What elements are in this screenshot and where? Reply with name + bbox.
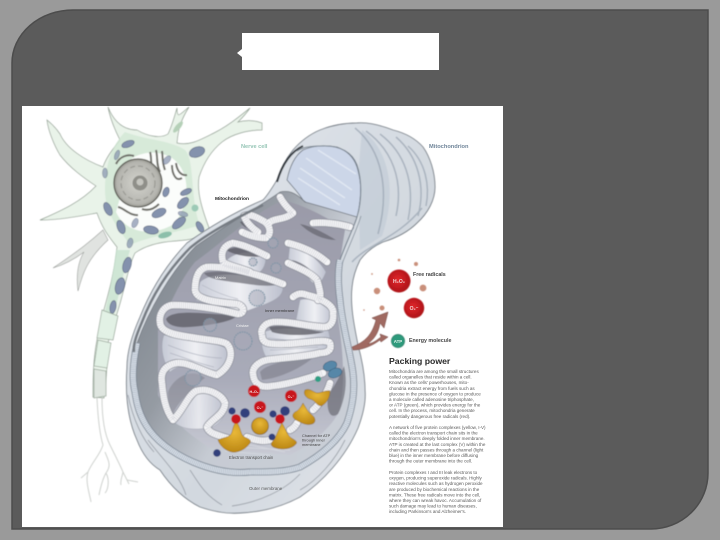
energy molecule label: Energy molecule <box>409 338 451 344</box>
ATP in chain <box>315 376 321 382</box>
cristae label: Cristae <box>236 323 249 328</box>
mitochondrion <box>126 123 435 513</box>
labels: O₂⁻ <box>410 306 419 312</box>
title box <box>237 33 439 70</box>
electron transport chain <box>213 359 343 457</box>
complex III <box>271 423 297 449</box>
ATP channel <box>322 359 343 380</box>
paragraph 3: such damage may lead to human diseases, <box>389 504 477 509</box>
free radicals label: Free radicals <box>413 272 446 278</box>
mitochondrion heading label: Mitochondrion <box>429 144 469 150</box>
electron transport chain label: Electron transport chain <box>229 455 274 460</box>
labels: ATP <box>394 339 402 344</box>
hydrogen peroxide molecule <box>388 270 410 292</box>
dark cristae pockets <box>166 221 346 416</box>
paragraph 1: potentially dangerous free radicals (red). <box>389 414 470 419</box>
labels: H₂O₂ <box>249 390 259 394</box>
channel label: Channel for ATP <box>302 433 331 438</box>
paragraph 2: chain and then passes through a channel (light <box>389 447 484 452</box>
neuron body <box>40 107 262 398</box>
neuron mitochondrion label: Mitochondrion <box>215 196 249 202</box>
outer membrane <box>126 123 435 513</box>
paragraph 3: where they can wreak havoc. Accumulation of <box>389 498 482 503</box>
paragraph 3: Protein complexes I and III leak electrons to <box>389 470 478 475</box>
free radicals in matrix <box>231 385 297 424</box>
matrix label: Matrix <box>215 275 226 280</box>
paragraph 1: Mitochondria are among the small structures <box>389 369 479 374</box>
paragraph 1: cell. In the process, mitochondria generate <box>389 408 475 413</box>
nerve cell <box>40 107 262 502</box>
paragraph 2: A network of five protein complexes (yellow, I-V) <box>389 425 486 430</box>
paragraph 2: mitochondrion's deeply folded inner membrane. <box>389 436 485 441</box>
free radical release <box>352 259 426 350</box>
cell shading <box>105 132 200 245</box>
paragraph 3: oxygen, producing superoxide radicals. Highly <box>389 476 482 481</box>
left outer wall <box>134 205 263 352</box>
golgi and ER <box>116 150 187 215</box>
text block: Packing power <box>389 356 486 514</box>
paragraph 3: are produced by biochemical reactions in the <box>389 487 480 492</box>
bottom folds <box>128 395 345 506</box>
dome folds <box>352 128 427 262</box>
fins <box>162 244 333 429</box>
paragraph 1: a molecule called adenosine triphosphate, <box>389 397 474 402</box>
paragraph 2: through the outer membrane into the cell. <box>389 459 472 464</box>
matrix streaks <box>225 443 290 455</box>
nucleolus <box>132 176 148 190</box>
nucleus <box>114 159 162 207</box>
complex I <box>218 422 250 452</box>
channel label: membrane <box>302 442 321 447</box>
paragraph 2: called the electron transport chain sits in the <box>389 431 478 436</box>
paragraph 1: chondria extract energy from fuels such as <box>389 386 475 391</box>
matrix <box>158 200 345 455</box>
neuron mitochondria <box>102 139 206 314</box>
paragraph 3: reactive molecules such as hydrogen peroxide <box>389 481 483 486</box>
heading: Packing power <box>389 356 451 366</box>
outer membrane label: Outer membrane <box>249 486 283 491</box>
inner membrane label: Inner membrane <box>265 308 295 313</box>
inner membrane: cristae <box>160 197 350 441</box>
paragraph 1: called organelles that reside within a cell. <box>389 375 472 380</box>
labels: O₂⁻ <box>257 406 263 410</box>
cristae vesicles <box>185 238 281 386</box>
nerve cell label: Nerve cell <box>241 144 268 150</box>
paragraph 1: glucose in the presence of oxygen to produce <box>389 391 481 396</box>
small radicals <box>363 259 426 311</box>
paragraph 1: or ATP (green), which provides energy for the <box>389 403 481 408</box>
paragraph 1: Known as the cells' powerhouses, mito- <box>389 380 469 385</box>
fin streaks <box>168 285 322 367</box>
left dark inner edge <box>277 146 303 182</box>
axon terminal <box>81 398 138 502</box>
labels: O₂⁻ <box>288 395 294 399</box>
superoxide molecule <box>404 298 424 318</box>
paragraph 3: including Parkinson's and Alzheimer's. <box>389 509 466 514</box>
complex IV <box>293 403 315 425</box>
outer ribbed tube <box>133 146 361 473</box>
complex II <box>252 418 268 434</box>
molecule labels: H₂O₂ <box>393 279 405 285</box>
inner dome <box>287 146 361 227</box>
paragraph 1 <box>389 369 481 419</box>
axon sheath <box>94 310 118 398</box>
paragraph 2: ATP is created at the last complex (V) within the <box>389 442 486 447</box>
complex V <box>304 389 330 406</box>
labels <box>215 144 486 514</box>
channel label: through inner <box>302 438 326 442</box>
paragraph 2: blue) in the inner membrane before diffusing <box>389 453 479 458</box>
dendrite: lower left <box>53 230 108 291</box>
paragraph 3: matrix. These free radicals move into the cell, <box>389 492 480 497</box>
paragraph 3 <box>389 470 483 514</box>
illustration panel <box>22 106 503 527</box>
energy molecule <box>391 334 405 348</box>
arrow: radicals and energy leaving <box>352 312 388 350</box>
dome shading <box>358 130 390 250</box>
inner wall <box>133 191 357 473</box>
electrons <box>213 406 290 457</box>
paragraph 2 <box>389 425 486 464</box>
